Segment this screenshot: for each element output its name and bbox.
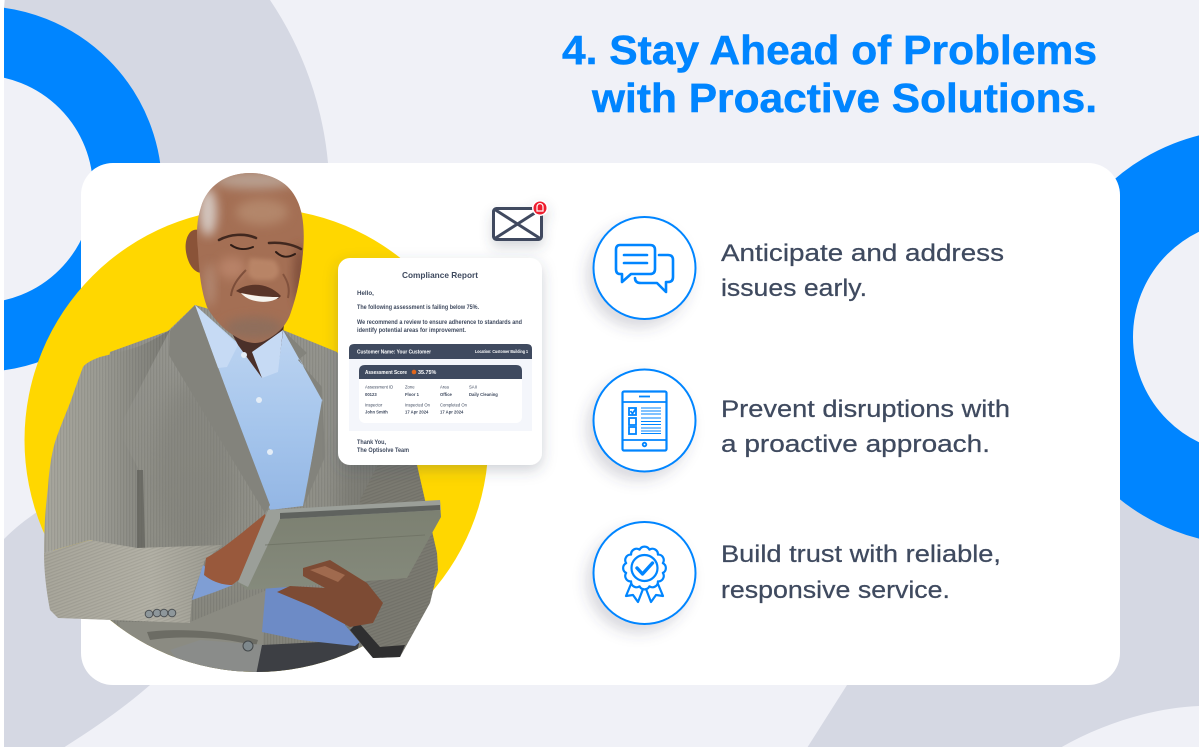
report message: The following assessment is failing below 75%. bbox=[357, 304, 479, 311]
shirt collars bbox=[195, 305, 283, 378]
left upper arm bbox=[44, 330, 170, 553]
text: prevent bbox=[721, 396, 1010, 458]
eyebrows bbox=[219, 235, 301, 249]
cheek bbox=[218, 257, 246, 279]
neck bbox=[225, 320, 284, 378]
text: prevent: Prevent disruptions with bbox=[721, 396, 1010, 423]
sign-off: The Optisolve Team bbox=[357, 448, 409, 454]
text: anticipate: issues early. bbox=[721, 275, 867, 302]
blue ring left bbox=[0, 40, 128, 338]
right hand bbox=[277, 560, 383, 627]
field labels: Area bbox=[440, 384, 450, 390]
report message: Hello, bbox=[357, 290, 374, 297]
right smile fold bbox=[283, 274, 289, 298]
teeth bbox=[241, 293, 279, 302]
left smile fold bbox=[231, 270, 246, 296]
jacket lapels bbox=[169, 305, 325, 513]
ear bbox=[186, 230, 204, 273]
tablet bbox=[238, 500, 441, 590]
grey arc top left bbox=[4, 0, 328, 163]
nose bbox=[248, 258, 279, 280]
text: build trust: Build trust with reliable, bbox=[721, 541, 1001, 568]
grey arc bottom right bbox=[807, 490, 1200, 748]
envelope icon with alert bbox=[494, 200, 548, 240]
report message: We recommend a review to ensure adherence to standards and bbox=[357, 319, 522, 326]
field values: Floor 1 bbox=[405, 392, 420, 397]
grey arc bottom left bbox=[4, 512, 150, 747]
report message: identify potential areas for improvement. bbox=[357, 327, 466, 334]
field labels: Inspector bbox=[365, 402, 383, 408]
yellow circle bbox=[24, 208, 488, 672]
field labels: SAII bbox=[469, 384, 477, 390]
jacket front button bbox=[243, 641, 253, 651]
right sleeve bbox=[345, 450, 438, 658]
assessment header bbox=[359, 365, 522, 379]
title bbox=[562, 27, 1097, 121]
left forearm sleeve bbox=[44, 540, 223, 623]
field labels bbox=[365, 384, 477, 408]
scalp highlight bbox=[213, 171, 297, 189]
icon: award badge bbox=[594, 522, 696, 624]
icon: chat bubbles bbox=[594, 217, 696, 319]
field values: 17 Apr 2024 bbox=[405, 410, 429, 414]
illustration: man holding a tablet bbox=[44, 170, 441, 680]
chin stubble bbox=[224, 317, 284, 339]
report background bbox=[338, 258, 542, 465]
moustache and smile bbox=[236, 285, 281, 299]
alert bell badge bbox=[532, 200, 548, 216]
forehead centre bbox=[236, 199, 288, 225]
field values bbox=[365, 392, 498, 414]
text: anticipate: Anticipate and address bbox=[721, 240, 1004, 267]
report title: Compliance Report bbox=[402, 270, 478, 280]
icon: tablet checklist bbox=[594, 370, 696, 472]
text: build trust bbox=[721, 541, 1001, 604]
customer name: Customer Name: Your Customer bbox=[357, 350, 432, 356]
report message bbox=[357, 290, 522, 334]
shirt cuff bbox=[192, 565, 233, 600]
location: Location: Customer Building 1 bbox=[475, 349, 529, 354]
field labels: Completed On bbox=[440, 402, 468, 408]
face base bbox=[197, 173, 304, 343]
lower shirt bbox=[262, 585, 375, 646]
tablet top edge bbox=[238, 500, 441, 587]
field labels: Assessment ID bbox=[365, 384, 393, 390]
customer header bar bbox=[349, 344, 532, 359]
blue ring right bbox=[1088, 174, 1201, 500]
head bbox=[197, 173, 304, 343]
field values: Daily Cleaning bbox=[469, 392, 498, 397]
torso and jacket bbox=[90, 305, 430, 680]
field labels: Zone bbox=[405, 384, 415, 390]
field labels: Inspected On bbox=[405, 402, 431, 408]
text: prevent: a proactive approach. bbox=[721, 431, 990, 458]
text: build trust: responsive service. bbox=[721, 577, 950, 604]
field values: John Smith bbox=[365, 410, 388, 414]
left face light bbox=[205, 263, 215, 307]
shirt buttons bbox=[241, 352, 273, 455]
assessment card bbox=[359, 365, 522, 423]
assessment score label: Assessment Score bbox=[365, 370, 407, 376]
compliance report card bbox=[338, 258, 542, 465]
sleeve buttons bbox=[145, 609, 176, 618]
envelope bbox=[494, 208, 542, 240]
sign-off bbox=[357, 440, 409, 454]
field values: 17 Apr 2024 bbox=[440, 410, 464, 414]
score value: 35.75% bbox=[418, 370, 436, 376]
closed eyes bbox=[231, 245, 295, 257]
right cheek shade bbox=[294, 245, 306, 305]
main white card bbox=[81, 163, 1120, 685]
forehead highlight bbox=[199, 188, 217, 236]
field values: 00123 bbox=[365, 392, 377, 397]
tablet back cover bbox=[238, 502, 441, 590]
shirt bbox=[195, 305, 323, 510]
field values: Office bbox=[440, 392, 453, 397]
title: 4. Stay Ahead of Problems bbox=[562, 27, 1097, 73]
text: anticipate bbox=[721, 240, 1004, 302]
sign-off: Thank You, bbox=[357, 440, 386, 446]
left hand bbox=[204, 514, 270, 585]
title: with Proactive Solutions. bbox=[591, 75, 1097, 121]
customer details panel bbox=[349, 352, 532, 431]
score status dot bbox=[412, 370, 416, 374]
